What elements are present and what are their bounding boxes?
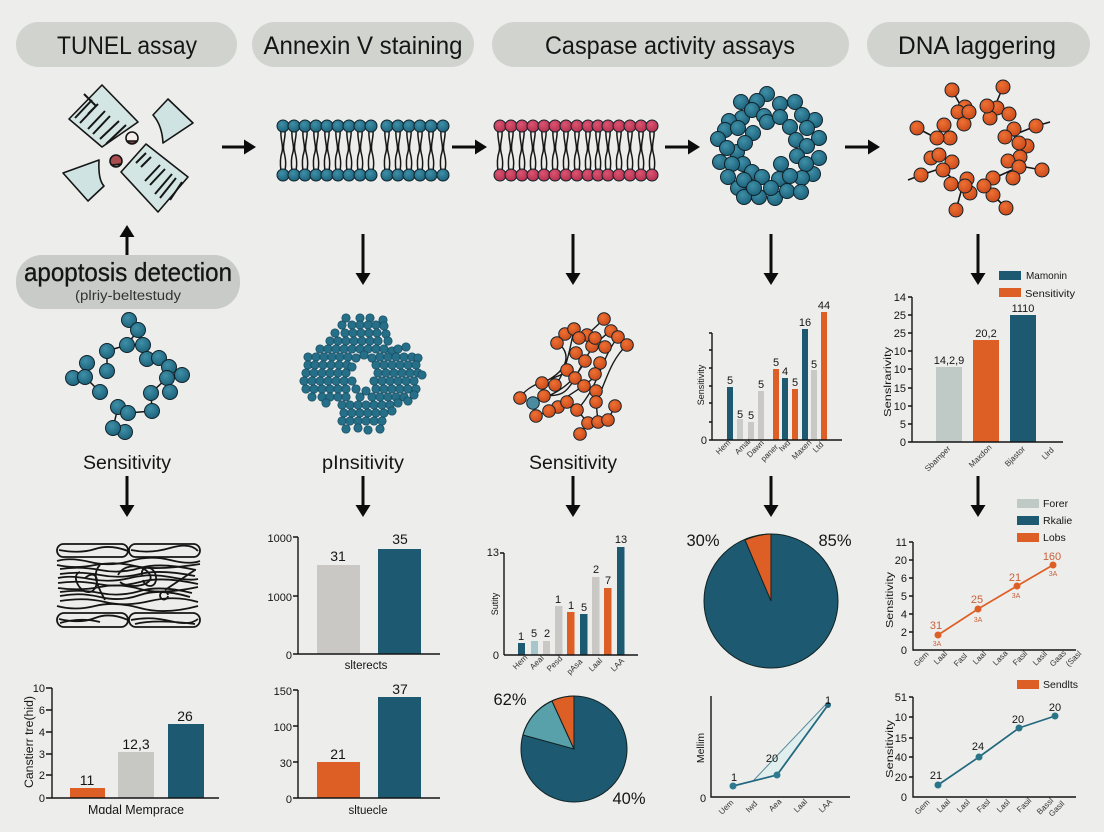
label: Sensitivity column 3: Sensitivity <box>529 453 618 474</box>
arrow: down row 2 column 3 <box>572 476 574 505</box>
chart: column 5 teal line chart: 15 <box>895 733 907 745</box>
chart: column 1 bar chart: 4 <box>39 727 45 739</box>
chart: column 4 bar chart: 5 <box>773 357 779 369</box>
chart: column 4 line chart: LAA <box>817 797 835 814</box>
chart: column 1 bar chart <box>24 683 219 817</box>
chart: column 4 bar chart: paner <box>759 442 780 463</box>
legend: upper chart column 5 <box>999 270 1076 300</box>
chart: column 5 bar chart: 15 <box>894 383 906 395</box>
chart: column 3 bar chart: 1 <box>568 600 574 612</box>
arrow: down row 2 column 2 <box>362 476 364 505</box>
icon: teal lipid bilayer <box>277 120 449 181</box>
chart: column 2 lower bar chart: 21 <box>330 746 346 762</box>
chart: column 5 bar chart: Bjastor <box>1003 444 1027 468</box>
chart: column 2 upper bar chart: 1000 <box>268 592 292 604</box>
chart: column 5 teal line chart: Laal <box>935 797 952 814</box>
legend: orange line chart: Forer <box>1043 498 1069 510</box>
arrow: down column 3 <box>572 234 574 273</box>
arrow: TUNEL to Annexin <box>222 146 244 148</box>
chart: column 4 bar chart: Iwd <box>777 438 792 453</box>
chart: column 5 bar chart: 14 <box>894 292 906 304</box>
chart: column 2 upper bar chart <box>268 531 440 672</box>
arrow: down row 2 column 1 <box>126 476 128 505</box>
chart: column 4 bar chart: 16 <box>799 317 811 329</box>
chart: column 5 orange line chart: Gaas <box>1048 649 1068 668</box>
chart: column 5 orange line chart: 3A <box>1012 593 1021 600</box>
chart: column 4 line chart: 1 <box>825 695 831 707</box>
chart: column 4 line chart: Iwd <box>744 799 759 814</box>
chart: column 4 line chart: Mellim <box>695 733 707 763</box>
chart: column 5 teal line chart: 51 <box>895 692 907 704</box>
chart: column 5 orange line chart: 4 <box>901 609 907 621</box>
arrow: down column 4 <box>770 234 772 273</box>
chart: column 1 bar chart: 11 <box>80 772 94 788</box>
legend: teal line chart: Sendlts <box>1043 679 1078 691</box>
chart: column 5 teal line chart: Bassl <box>1035 796 1055 816</box>
arrow: down row 2 column 4 <box>770 476 772 505</box>
chart: column 3 bar chart: 5 <box>581 602 587 614</box>
arrow: ring to DNA <box>845 146 868 148</box>
icon: orange DNA ring <box>908 80 1050 217</box>
legend: upper chart column 5: Mamonin <box>1026 270 1067 282</box>
heading pill: DNA laggering: DNA laggering <box>898 32 1056 60</box>
arrow: down column 5 <box>976 234 980 273</box>
chart: column 5 teal line chart: Sensitivity <box>884 719 896 778</box>
chart: column 5 bar chart: 10 <box>894 401 906 413</box>
legend: upper chart column 5: Sensitivity <box>1025 288 1076 300</box>
chart: column 5 orange line chart: Laal <box>932 649 949 666</box>
chart: column 5 bar chart: 1110 <box>1012 303 1034 315</box>
arrow: down column 2 <box>362 234 364 273</box>
label pill: apoptosis detection: (plriy-beltestudy <box>75 288 181 303</box>
chart: column 2 upper bar chart: slterects <box>345 660 388 672</box>
chart: column 3 bar chart: 1 <box>518 631 524 643</box>
heading pill: TUNEL assay <box>16 22 237 67</box>
legend: teal line chart <box>1017 679 1078 691</box>
arrow: membrane to ring <box>665 146 688 148</box>
chart: column 5 orange line chart: Sensitivity <box>884 571 896 628</box>
chart: column 4 bar chart: 4 <box>782 366 788 378</box>
heading pill: DNA laggering <box>867 22 1090 67</box>
chart: column 3 pie chart: 40% <box>612 790 646 808</box>
chart: column 5 orange line chart: Lasil <box>1031 649 1049 667</box>
chart: column 3 bar chart: Pesd <box>545 654 564 673</box>
chart: column 5 teal line chart: Lasl <box>995 798 1012 814</box>
chart: column 1 bar chart: Mɑdal Memprace <box>88 803 184 817</box>
chart: column 5 teal line chart: 10 <box>895 712 907 724</box>
label pill: apoptosis detection <box>16 255 240 309</box>
chart: column 5 bar chart: 14,2,9 <box>934 355 964 367</box>
chart: column 2 lower bar chart <box>274 681 440 817</box>
chart: column 5 bar chart: 20,2 <box>975 328 997 340</box>
chart: column 5 orange line chart: 21 <box>1009 572 1021 584</box>
chart: column 3 bar chart: Aeal <box>528 654 546 671</box>
chart: column 4 bar chart: 0 <box>701 435 707 447</box>
legend: orange line chart: Rkalie <box>1043 515 1072 527</box>
chart: column 4 bar chart: 44 <box>818 300 830 312</box>
chart: column 4 pie chart <box>686 532 852 668</box>
chart: column 5 teal line chart: Gem <box>913 798 932 816</box>
label: Sensitivity column 1: Sensitivity <box>83 453 172 474</box>
chart: column 4 line chart <box>695 695 850 816</box>
chart: column 5 orange line chart: 11 <box>896 537 907 549</box>
chart: column 2 lower bar chart: 100 <box>274 722 292 734</box>
chart: column 5 bar chart: Llrd <box>1040 446 1056 461</box>
chart: column 5 teal line chart: Fasil <box>1015 796 1034 814</box>
chart: column 3 bar chart: 7 <box>605 575 611 587</box>
chart: column 3 bar chart: 0 <box>493 650 499 662</box>
arrow: up to TUNEL icon <box>126 237 128 255</box>
chart: column 1 bar chart: 12,3 <box>122 736 150 752</box>
icon: tangled orange molecule <box>514 313 633 440</box>
chart: column 4 bar chart: Maxen <box>790 438 813 461</box>
chart: column 5 bar chart: 5 <box>900 419 906 431</box>
heading pill: TUNEL assay: TUNEL assay <box>57 32 197 60</box>
chart: column 4 bar chart: 5 <box>748 410 754 422</box>
chart: column 5 bar chart: 10 <box>894 346 906 358</box>
chart: column 5 orange line chart: Fasl <box>952 651 969 668</box>
chart: column 5 bar chart: 0 <box>900 437 906 449</box>
chart: column 1 bar chart: 6 <box>39 705 45 717</box>
chart: column 5 bar chart: 10 <box>894 364 906 376</box>
chart: column 5 teal line chart: 40 <box>895 752 907 764</box>
chart: column 1 bar chart: 3 <box>39 749 45 761</box>
chart: column 5 bar chart: 25 <box>894 310 906 322</box>
chart: column 4 bar chart <box>696 300 842 463</box>
chart: column 1 bar chart: 10 <box>33 683 45 695</box>
chart: column 3 bar chart: pAsa <box>565 657 585 676</box>
icon: small teal molecule <box>66 312 190 440</box>
chart: column 3 bar chart: Hem <box>511 653 530 671</box>
chart: column 5 orange line chart: 5 <box>901 591 907 603</box>
heading pill: Annexin V staining: Annexin V staining <box>264 32 462 60</box>
label: pInsitivity column 2: pInsitivity <box>322 453 405 474</box>
chart: column 5 orange line chart: Gem <box>912 650 931 668</box>
chart: column 5 orange line chart: Fasil <box>1011 649 1030 667</box>
chart: column 5 bar chart: Senslrarivity <box>882 346 894 417</box>
icon: tangled membrane lines <box>57 544 200 627</box>
chart: column 3 bar chart: 1 <box>555 594 561 606</box>
chart: column 4 bar chart: Dawn <box>745 439 766 459</box>
chart: column 1 bar chart: 0 <box>39 793 45 805</box>
heading pill: Annexin V staining <box>252 22 474 67</box>
chart: column 1 bar chart: 2 <box>39 770 45 782</box>
chart: column 3 bar chart: 2 <box>593 564 599 576</box>
chart: column 5 orange line chart <box>884 537 1083 668</box>
chart: column 5 orange line chart: 160 <box>1043 551 1061 563</box>
chart: column 1 bar chart: 26 <box>177 708 193 724</box>
chart: column 4 bar chart: Hem <box>714 438 733 456</box>
chart: column 4 bar chart: 5 <box>758 379 764 391</box>
chart: column 5 orange line chart: 2 <box>901 627 907 639</box>
chart: column 5 orange line chart: 31 <box>930 620 942 632</box>
chart: column 5 orange line chart: 25 <box>971 594 983 606</box>
chart: column 5 orange line chart: 3A <box>974 617 983 624</box>
chart: column 5 teal line chart: Gasil <box>1047 799 1066 818</box>
chart: column 5 teal line chart: Fasl <box>975 797 992 814</box>
chart: column 5 orange line chart: 0 <box>901 645 907 657</box>
chart: column 2 lower bar chart: 150 <box>274 686 292 698</box>
icon: dense teal cluster <box>300 314 426 434</box>
chart: column 5 teal line chart: 24 <box>972 741 984 753</box>
icon: teal bead ring <box>710 86 826 206</box>
chart: column 3 bar chart: 13 <box>487 547 499 559</box>
chart: column 5 orange line chart: Lasa <box>991 648 1010 667</box>
chart: column 4 bar chart: 5 <box>792 377 798 389</box>
legend: orange line chart <box>1017 498 1072 544</box>
chart: column 5 bar chart: Maxdon <box>967 443 994 469</box>
arrow: Annexin to Caspase membrane <box>452 146 475 148</box>
legend: orange line chart: Lobs <box>1043 532 1066 544</box>
chart: column 4 line chart: 1 <box>731 772 737 784</box>
chart: column 5 orange line chart: Laal <box>971 649 988 666</box>
chart: column 3 pie chart <box>493 691 646 808</box>
chart: column 5 teal line chart: 20 <box>1049 702 1061 714</box>
chart: column 3 bar chart: 2 <box>544 628 550 640</box>
chart: column 4 pie chart: 85% <box>818 532 852 550</box>
chart: column 4 bar chart: Amar <box>733 436 753 456</box>
chart: column 5 orange line chart: (Sasl <box>1064 649 1083 668</box>
chart: column 3 bar chart: Laal <box>587 656 604 673</box>
chart: column 4 line chart: 20 <box>766 753 778 765</box>
chart: column 5 teal line chart: 21 <box>930 770 942 782</box>
chart: column 2 upper bar chart: 1000 <box>268 533 292 545</box>
chart: column 3 bar chart: Sutity <box>490 592 500 615</box>
chart: column 5 teal line chart <box>884 692 1076 818</box>
chart: column 5 bar chart <box>882 292 1063 473</box>
chart: column 5 bar chart: Sbamper <box>923 444 953 473</box>
chart: column 2 lower bar chart: 0 <box>286 794 292 806</box>
chart: column 5 teal line chart: 20 <box>1012 714 1024 726</box>
chart: column 3 bar chart: 13 <box>615 534 627 546</box>
heading pill: Caspase activity assays: Caspase activity assays <box>545 32 795 60</box>
chart: column 4 line chart: Uem <box>717 798 736 816</box>
chart: column 2 upper bar chart: 31 <box>330 548 346 564</box>
chart: column 5 orange line chart: 3A <box>933 641 942 648</box>
chart: column 5 orange line chart: 20 <box>895 555 907 567</box>
chart: column 5 orange line chart: 3A <box>1049 571 1058 578</box>
chart: column 4 bar chart: 5 <box>811 359 817 371</box>
chart: column 4 line chart: Aea <box>767 797 784 813</box>
chart: column 4 pie chart: 30% <box>686 532 720 550</box>
chart: column 3 bar chart: LAA <box>609 656 627 673</box>
chart: column 2 lower bar chart: 37 <box>392 681 408 697</box>
chart: column 3 pie chart: 62% <box>493 691 527 709</box>
chart: column 2 lower bar chart: sltuecle <box>348 805 388 817</box>
chart: column 2 upper bar chart: 35 <box>392 531 408 547</box>
icon: red lipid bilayer <box>494 120 658 181</box>
chart: column 4 bar chart: Sensitivity <box>696 364 706 405</box>
chart: column 2 upper bar chart: 0 <box>286 650 292 662</box>
chart: column 5 bar chart: 25 <box>894 328 906 340</box>
label pill: apoptosis detection: apoptosis detection <box>24 257 232 287</box>
chart: column 5 teal line chart: Lasl <box>955 798 972 814</box>
chart: column 4 bar chart: Ltd <box>811 440 825 454</box>
chart: column 5 teal line chart: 20 <box>895 772 907 784</box>
chart: column 3 bar chart: 5 <box>531 628 537 640</box>
chart: column 4 bar chart: 5 <box>727 375 733 387</box>
heading pill: Caspase activity assays <box>492 22 849 67</box>
chart: column 5 orange line chart: 6 <box>901 573 907 585</box>
chart: column 1 bar chart: Canstierr tre(hid) <box>24 696 36 788</box>
chart: column 4 line chart: Laal <box>792 797 809 814</box>
chart: column 5 teal line chart: 0 <box>901 792 907 804</box>
chart: column 4 bar chart: 5 <box>737 409 743 421</box>
chart: column 3 bar chart <box>487 534 638 676</box>
chart: column 2 lower bar chart: 30 <box>280 758 292 770</box>
arrow: down row 2 column 5 <box>976 476 980 505</box>
icon: TUNEL fragmented membrane <box>63 85 193 212</box>
chart: column 4 line chart: 0 <box>700 793 706 805</box>
